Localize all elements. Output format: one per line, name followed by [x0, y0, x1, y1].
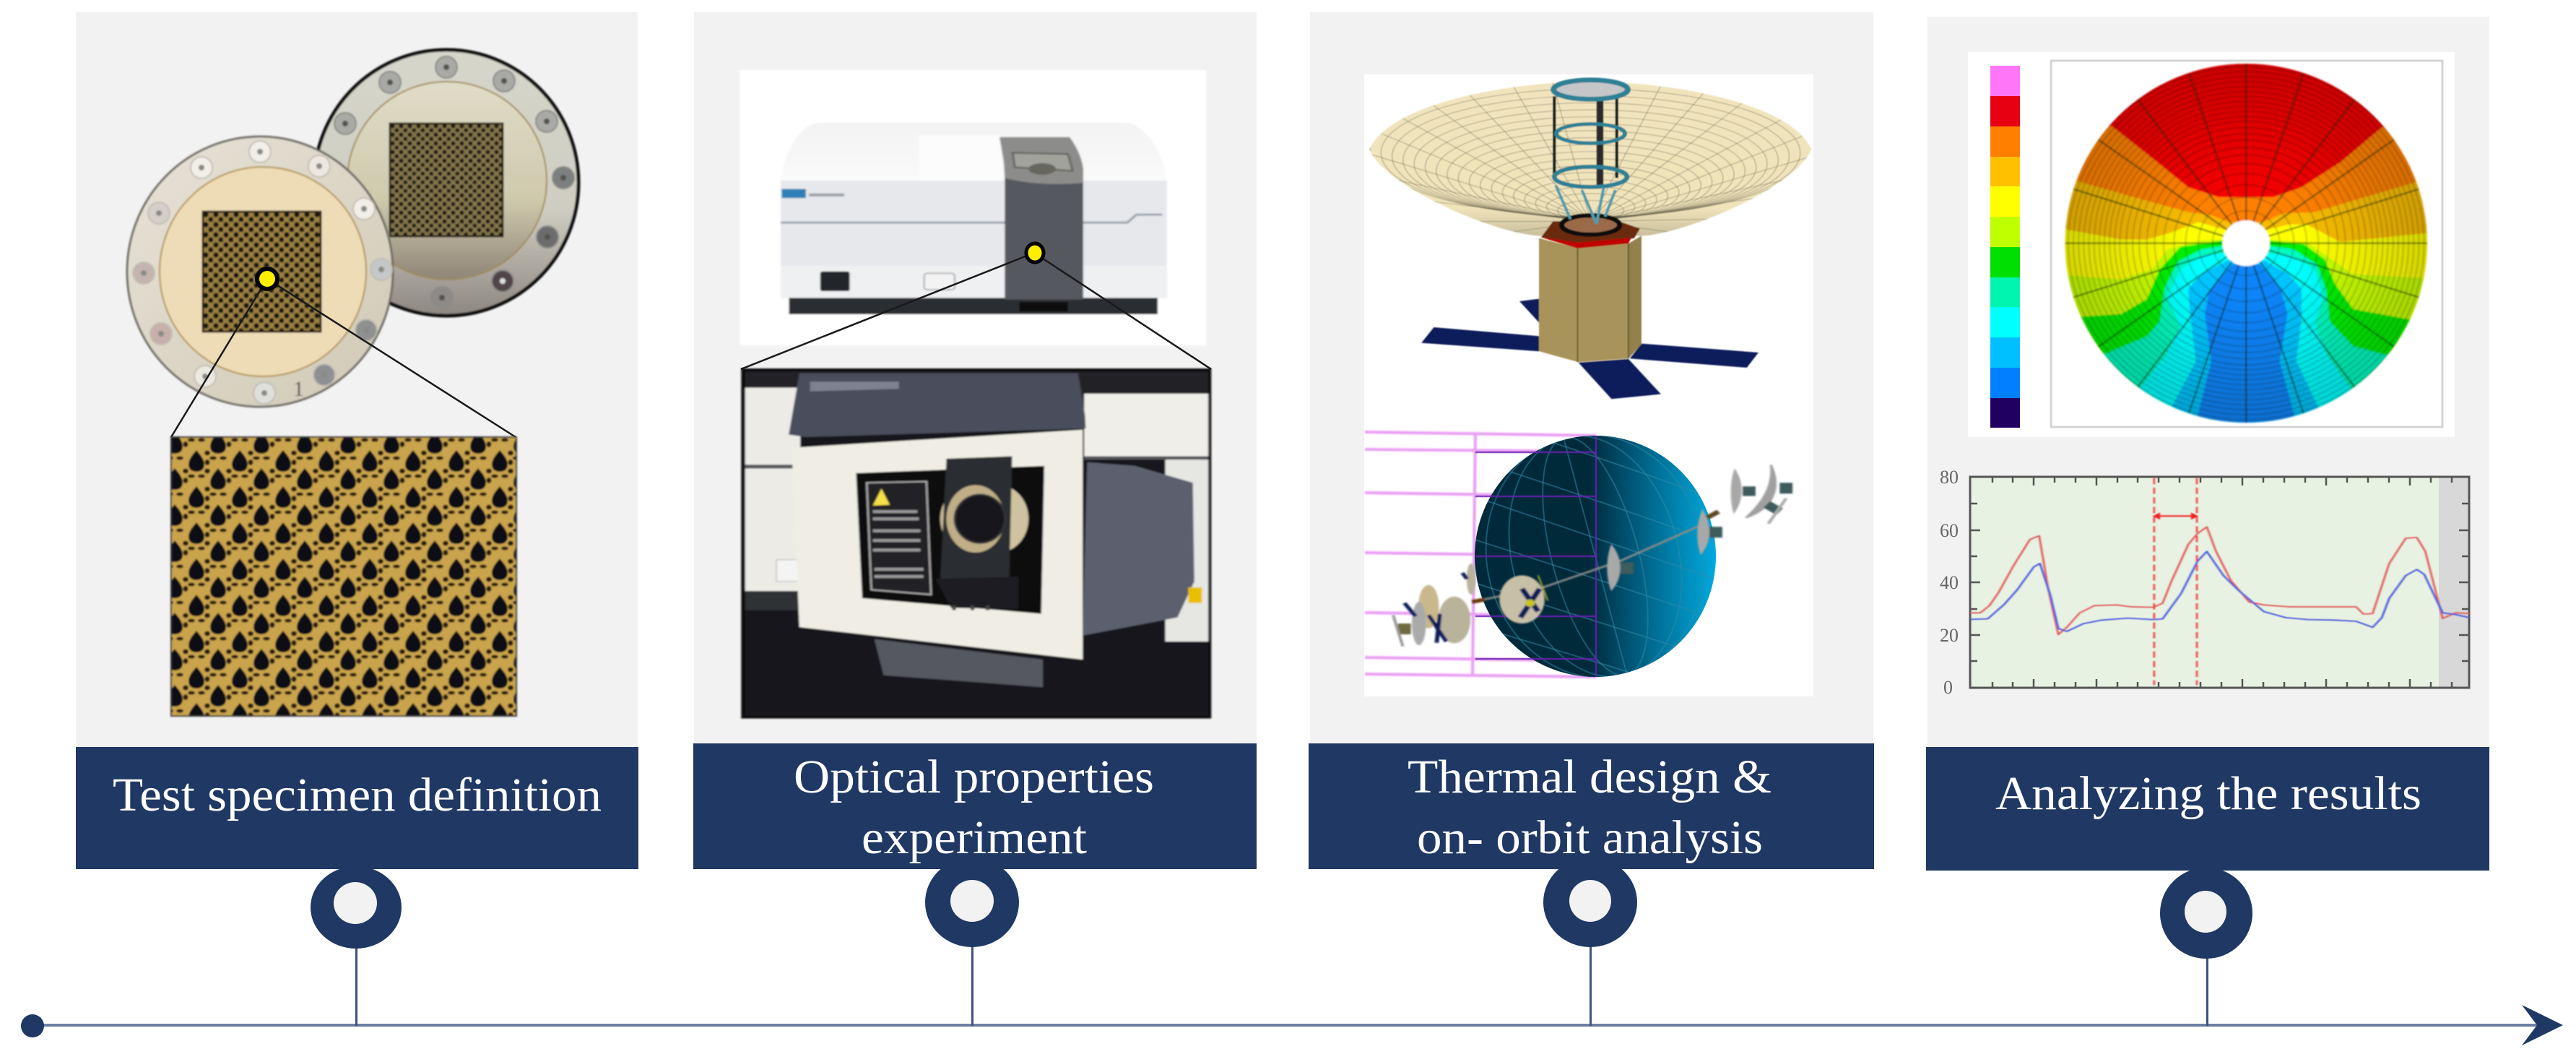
- spectrophotometer photo: [740, 70, 1206, 345]
- heading: thermal design and on-orbit analysis: on- orbit analysis: [1417, 811, 1763, 864]
- panel: analyzing the results: [1927, 17, 2489, 749]
- line chart: temperature over time: [1940, 467, 2470, 698]
- zoom lines: [741, 253, 1211, 369]
- line chart: temperature over time: 60: [1940, 520, 1959, 541]
- mesh close-up photo: [171, 437, 516, 716]
- heading: analyzing the results: [1926, 747, 2489, 871]
- heading: test specimen definition: [76, 747, 638, 869]
- heading: thermal design and on-orbit analysis: Thermal design &: [1408, 751, 1771, 803]
- icon: yellow marker: [257, 269, 277, 289]
- line chart: temperature over time: 0: [1943, 677, 1953, 698]
- line chart: temperature over time: 20: [1940, 625, 1959, 646]
- icon: back specimen disc: [314, 50, 578, 316]
- timeline axis: [21, 1005, 2563, 1045]
- line chart: temperature over time: 80: [1940, 467, 1959, 488]
- temperature contour disc: [2050, 54, 2442, 432]
- milestone marker 2: [925, 858, 1019, 1026]
- heading: test specimen definition: Test specimen definition: [113, 769, 602, 821]
- icon: yellow marker: [1026, 243, 1044, 262]
- zoom lines: [171, 279, 516, 437]
- line chart: temperature over time: 40: [1940, 572, 1959, 593]
- panel: test specimen definition: [76, 12, 638, 749]
- panel: optical properties experiment: [694, 12, 1257, 745]
- temperature colour scale: [1990, 66, 2020, 428]
- icon: front specimen disc: [127, 137, 393, 407]
- icon: front specimen disc: 1: [293, 377, 304, 401]
- heading: optical properties experiment: [693, 743, 1257, 869]
- panel: thermal design and on-orbit analysis: [1310, 12, 1873, 745]
- heading: optical properties experiment: Optical properties: [794, 751, 1154, 803]
- accessory photo: [741, 368, 1211, 719]
- milestone marker 3: [1543, 858, 1637, 1026]
- heading: thermal design and on-orbit analysis: [1309, 743, 1874, 869]
- milestone marker 4: [2160, 868, 2252, 1026]
- heading: analyzing the results: Analyzing the results: [1995, 767, 2421, 820]
- orbit diagram: [1363, 429, 1794, 679]
- heading: optical properties experiment: experiment: [862, 811, 1087, 864]
- satellite model: [1369, 80, 1811, 399]
- milestone marker 1: [311, 866, 402, 1026]
